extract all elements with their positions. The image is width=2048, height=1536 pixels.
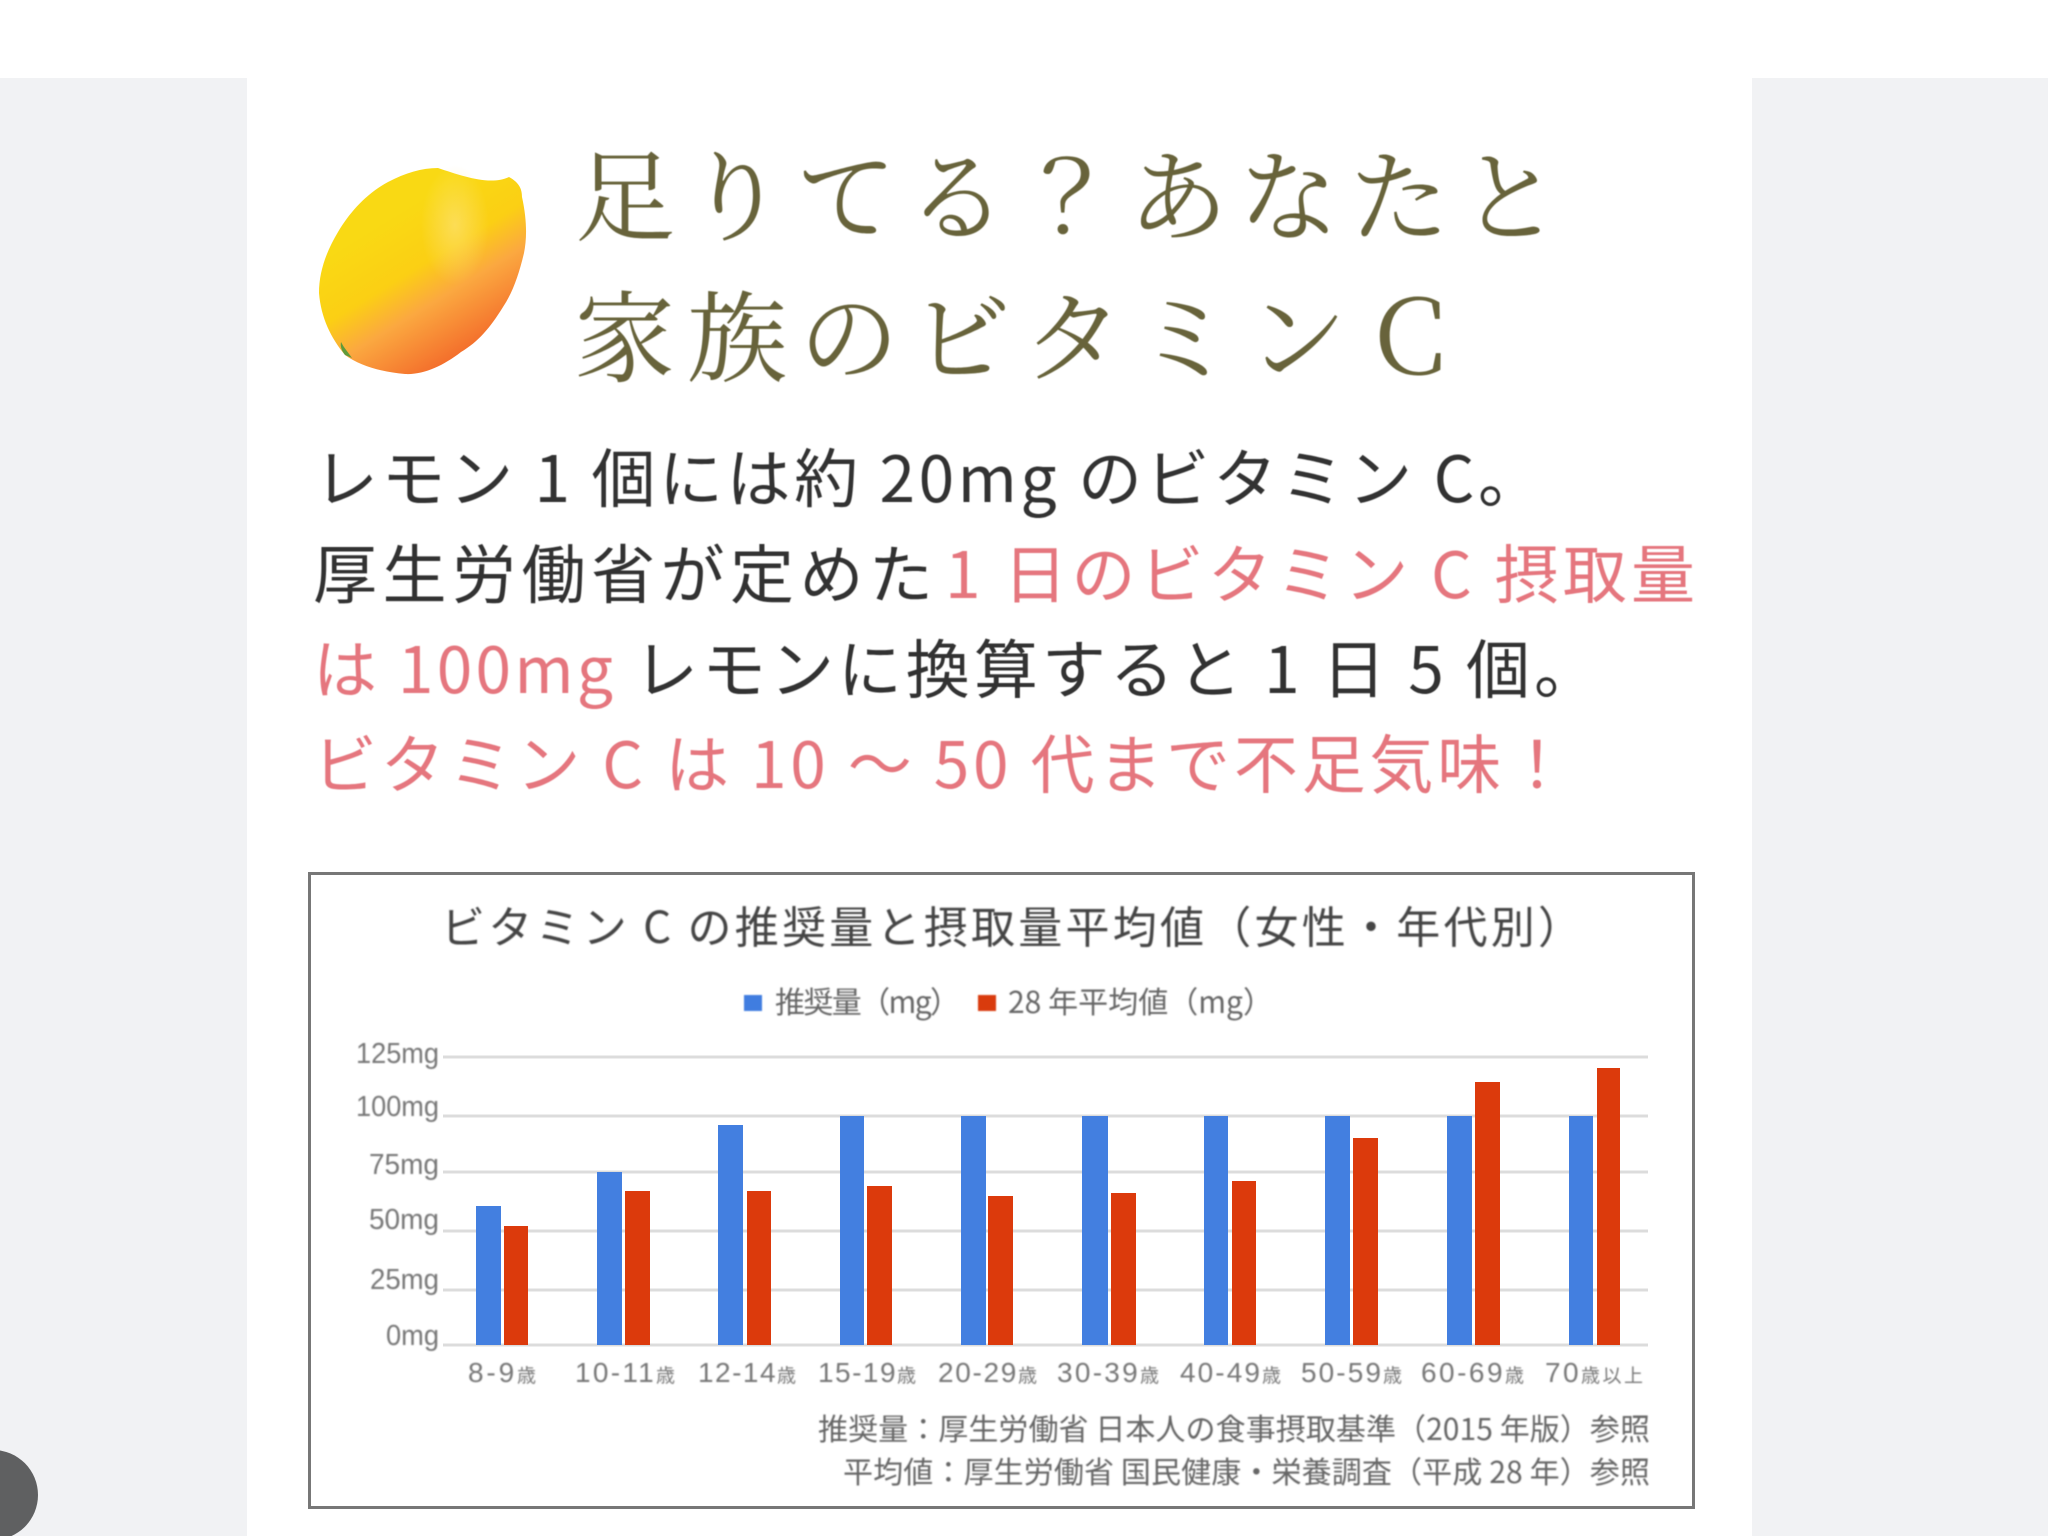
title line 2: 家族のビタミン xyxy=(575,259,1347,403)
y axis labels: 25mg xyxy=(370,1264,439,1296)
y axis labels xyxy=(356,1038,439,1352)
x axis labels: 50-59歳 xyxy=(1301,1357,1402,1388)
x axis labels: 10-11歳 xyxy=(575,1357,675,1388)
chart source notes: 推奨量：厚生労働省 日本人の食事摂取基準（2015 年版）参照 xyxy=(818,1405,1650,1449)
x axis labels: 40-49歳 xyxy=(1180,1357,1281,1388)
text line 2 highlight: 1 日のビタミン C 摂取量 xyxy=(945,525,1695,617)
x axis labels: 30-39歳 xyxy=(1057,1357,1159,1388)
chart legend xyxy=(744,978,1273,1022)
blue bars: recommended amount xyxy=(476,1116,1593,1345)
text line 4 highlight: ビタミン C は 10 〜 50 代まで不足気味！ xyxy=(313,715,1569,807)
x axis labels: 8-9歳 xyxy=(468,1357,536,1388)
y axis labels: 0mg xyxy=(386,1320,439,1352)
text line 3 black: レモンに換算すると 1 日 5 個。 xyxy=(634,620,1598,712)
chart legend: 推奨量（mg） xyxy=(775,978,960,1022)
title xyxy=(575,118,1560,404)
icon: papaya xyxy=(319,165,526,374)
text line 3 highlight: は 100mg xyxy=(313,620,613,712)
chart frame xyxy=(310,874,1694,1508)
gridlines xyxy=(443,1057,1648,1345)
intro text block xyxy=(313,429,1695,807)
panel: chart xyxy=(310,874,1694,1508)
x axis labels: 70歳以上 xyxy=(1545,1357,1643,1388)
right background band xyxy=(1752,78,2048,1536)
chart source notes: 平均値：厚生労働省 国民健康・栄養調査（平成 28 年）参照 xyxy=(843,1448,1650,1492)
y axis labels: 125mg xyxy=(356,1038,439,1070)
x axis labels: 20-29歳 xyxy=(938,1357,1037,1388)
icon: round floating button xyxy=(0,1450,38,1536)
y axis labels: 75mg xyxy=(369,1149,439,1181)
x axis labels: 15-19歳 xyxy=(818,1357,916,1388)
chart source notes xyxy=(818,1405,1650,1492)
x axis labels: 60-69歳 xyxy=(1421,1357,1524,1388)
red bars: average intake xyxy=(504,1068,1620,1345)
title line 1: 足りてる？あなたと xyxy=(575,118,1560,262)
x axis labels: 12-14歳 xyxy=(698,1357,796,1388)
x axis labels xyxy=(468,1357,1643,1388)
text line 1: レモン 1 個には約 20mg のビタミン C。 xyxy=(314,429,1542,521)
title letter C: C xyxy=(1374,254,1446,404)
chart title: ビタミン C の推奨量と摂取量平均値（女性・年代別） xyxy=(441,892,1582,956)
left background band xyxy=(0,78,247,1536)
chart legend: 28 年平均値（mg） xyxy=(1008,978,1273,1022)
text line 2 black: 厚生労働省が定めた xyxy=(313,525,933,617)
y axis labels: 50mg xyxy=(369,1204,439,1236)
y axis labels: 100mg xyxy=(356,1091,439,1123)
